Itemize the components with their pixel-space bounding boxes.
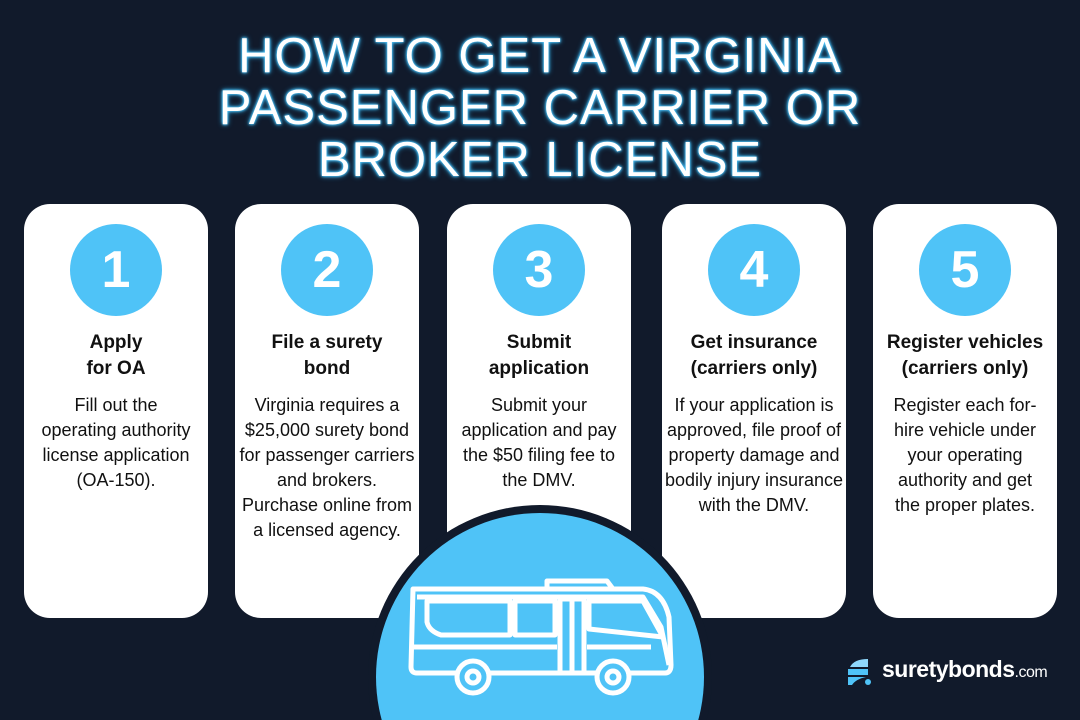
card 2	[235, 204, 419, 618]
card 4: 4	[740, 241, 768, 299]
card 4: Get insurance	[691, 332, 817, 353]
card 5: 5	[951, 241, 979, 299]
card 1: 1	[102, 241, 130, 299]
card 4	[662, 204, 846, 618]
logo text: suretybonds.com	[882, 656, 1047, 682]
card 1: for OA	[86, 358, 146, 379]
card 1: Fill out the operating authority license application (OA-150).	[41, 395, 191, 490]
title: PASSENGER CARRIER OR	[219, 81, 861, 135]
title: HOW TO GET A VIRGINIA	[238, 29, 842, 83]
card 5: Register vehicles	[887, 332, 1043, 353]
card 4: If your application is approved, file proof of property damage and bodily injury insurance with the DMV.	[665, 395, 843, 515]
card 2: bond	[304, 358, 350, 379]
card 1: Apply	[90, 332, 142, 353]
icon: bus	[411, 581, 671, 693]
card 3	[447, 204, 631, 618]
card 2: File a surety	[272, 332, 382, 353]
card 3: 3	[525, 241, 553, 299]
card 2: Virginia requires a $25,000 surety bond for passenger carriers and brokers. Purchase online from a licensed agency.	[239, 395, 415, 540]
card 1	[24, 204, 208, 618]
card 3: Submit your application and pay the $50 filing fee to the DMV.	[461, 395, 617, 490]
icon: logo mark	[848, 659, 871, 685]
title	[218, 29, 861, 187]
bus circle	[376, 505, 704, 720]
card 5: (carriers only)	[902, 358, 1028, 379]
logo	[848, 656, 1047, 685]
card 5	[873, 204, 1057, 618]
card 4: (carriers only)	[691, 358, 817, 379]
card 3: Submit	[507, 332, 571, 353]
card 5: Register each for-hire vehicle under your operating authority and get the proper plates.	[893, 395, 1037, 515]
title: BROKER LICENSE	[318, 133, 762, 187]
card 2: 2	[313, 241, 341, 299]
card 3: application	[489, 358, 589, 379]
